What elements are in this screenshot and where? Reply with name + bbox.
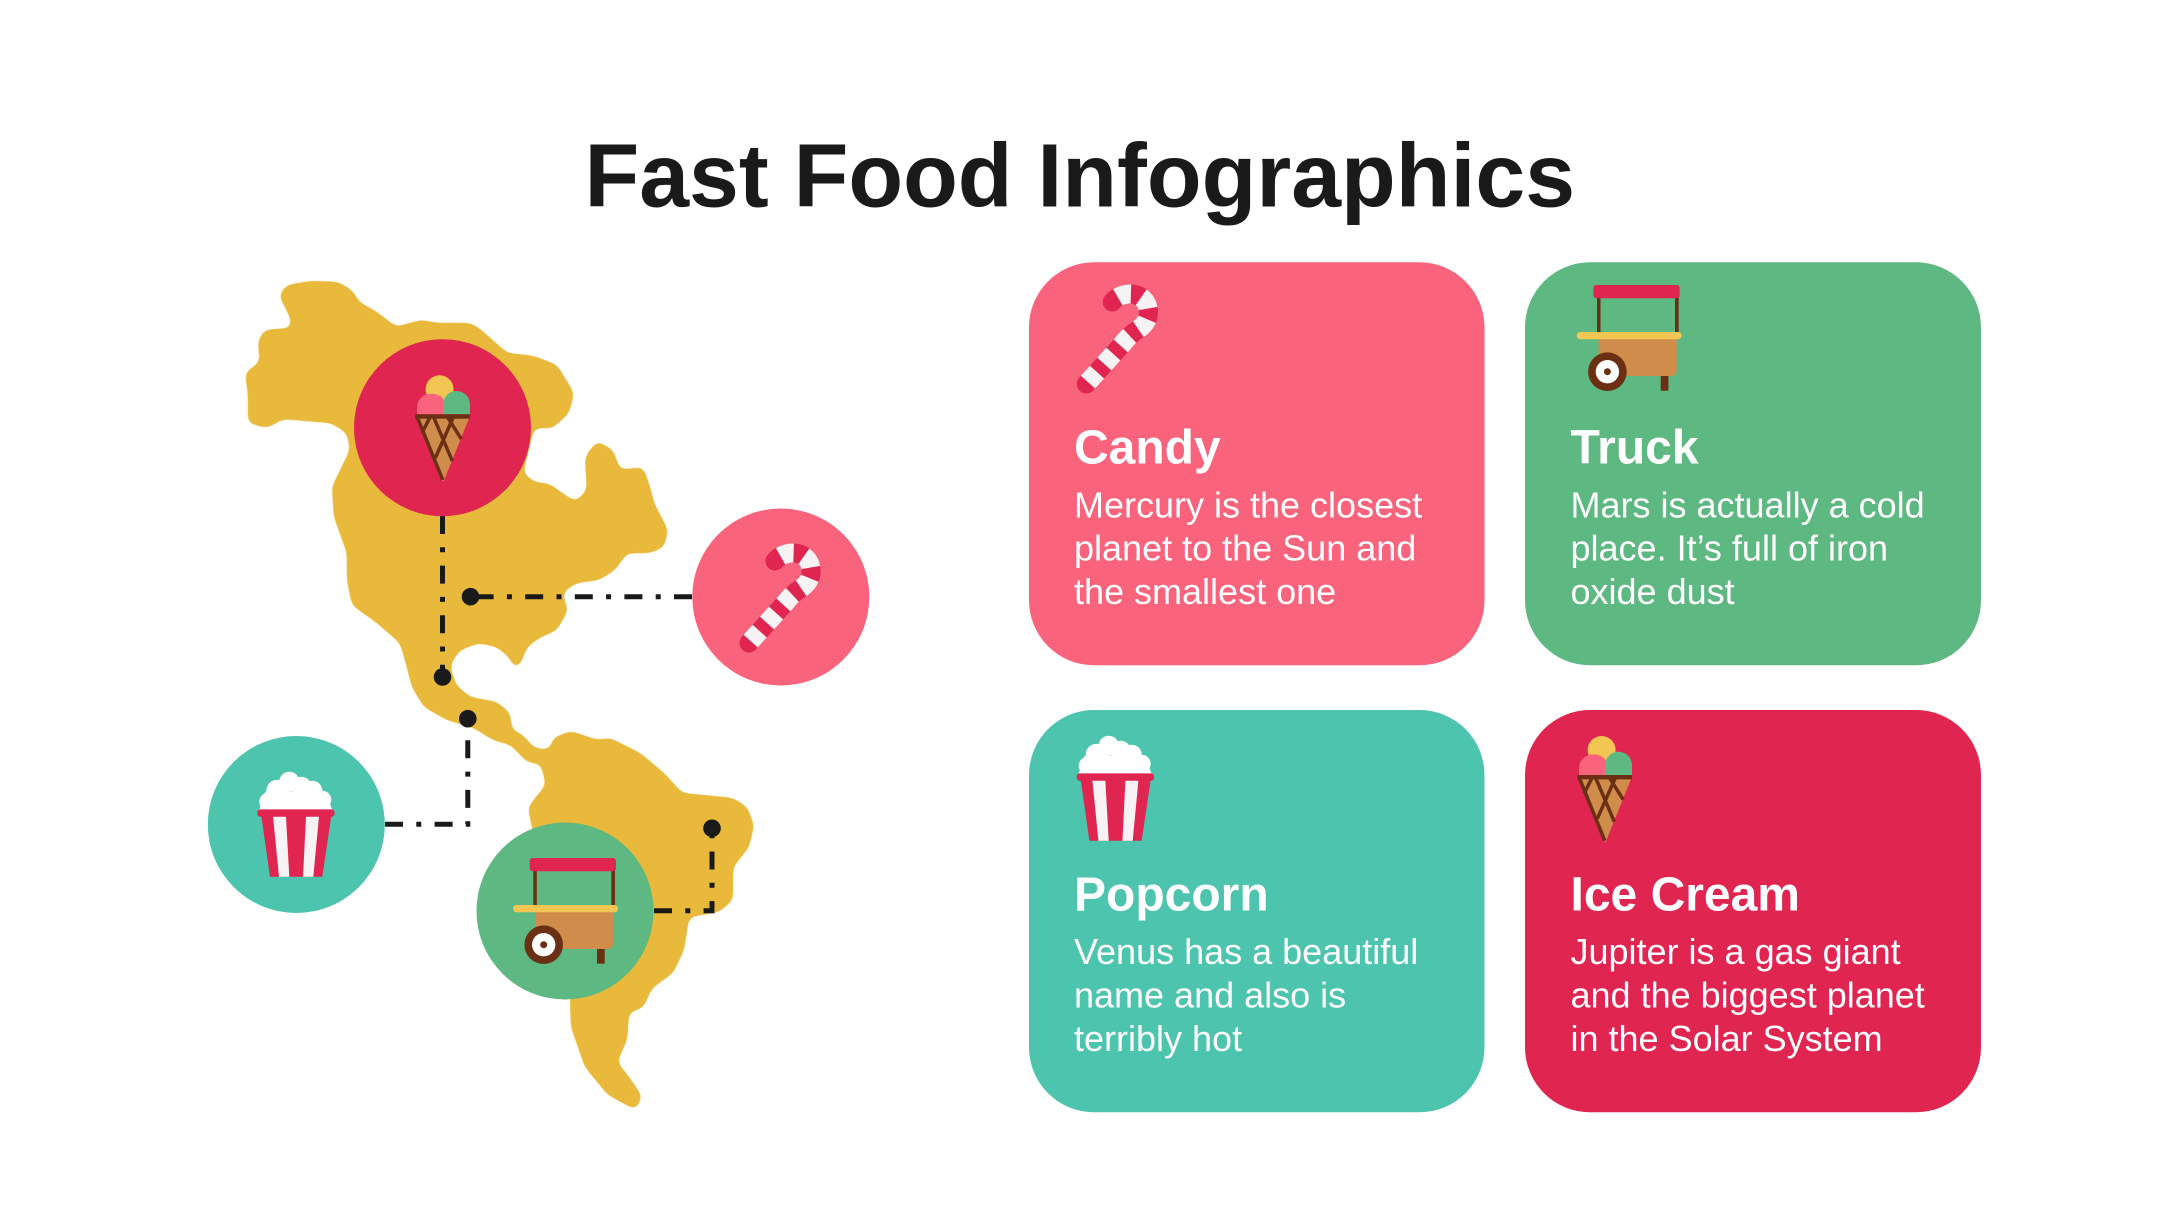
icon: ice cream cone <box>1577 736 1632 842</box>
map marker: truck <box>476 822 654 1000</box>
icon: food truck <box>1577 285 1682 391</box>
text: truck description: oxide dust <box>1570 571 1735 612</box>
heading: ice cream: Ice Cream <box>1570 868 1800 922</box>
heading: truck: Truck <box>1570 422 1699 474</box>
panel: truck <box>1525 262 1981 665</box>
connector: truck to dot <box>654 828 712 911</box>
connector: ice cream to dot <box>440 516 445 677</box>
text: popcorn description: Venus has a beautiful <box>1074 931 1418 972</box>
marker dots <box>434 588 721 837</box>
icon: candy cane <box>1086 294 1148 384</box>
text: candy description: planet to the Sun and <box>1074 528 1416 568</box>
text: popcorn description: terribly hot <box>1074 1018 1242 1059</box>
connector: popcorn to dot <box>385 719 468 824</box>
panel: candy <box>1029 262 1484 665</box>
connector: candy to dot <box>470 594 692 599</box>
icon: popcorn <box>1077 736 1154 841</box>
map marker: candy <box>692 508 869 686</box>
text: ice cream description: in the Solar System <box>1570 1018 1883 1059</box>
panel: ice cream <box>1525 710 1981 1112</box>
title: Fast Food Infographics <box>584 126 1575 226</box>
text: truck description: Mars is actually a cold <box>1570 484 1925 526</box>
text: ice cream description: Jupiter is a gas giant <box>1570 931 1901 972</box>
text: ice cream description: and the biggest planet <box>1570 974 1925 1016</box>
map marker: ice cream <box>354 339 531 516</box>
map: the Americas with markers <box>245 281 754 1110</box>
map marker: popcorn <box>208 736 385 913</box>
text: popcorn description: name and also is <box>1074 974 1346 1016</box>
panel: popcorn <box>1029 710 1484 1112</box>
heading: candy: Candy <box>1074 422 1221 474</box>
text: candy description: Mercury is the closest <box>1074 484 1422 526</box>
text: truck description: place. It’s full of iron <box>1570 528 1888 568</box>
text: candy description: the smallest one <box>1074 571 1336 612</box>
heading: popcorn: Popcorn <box>1074 868 1269 922</box>
continent shape <box>245 281 754 1110</box>
